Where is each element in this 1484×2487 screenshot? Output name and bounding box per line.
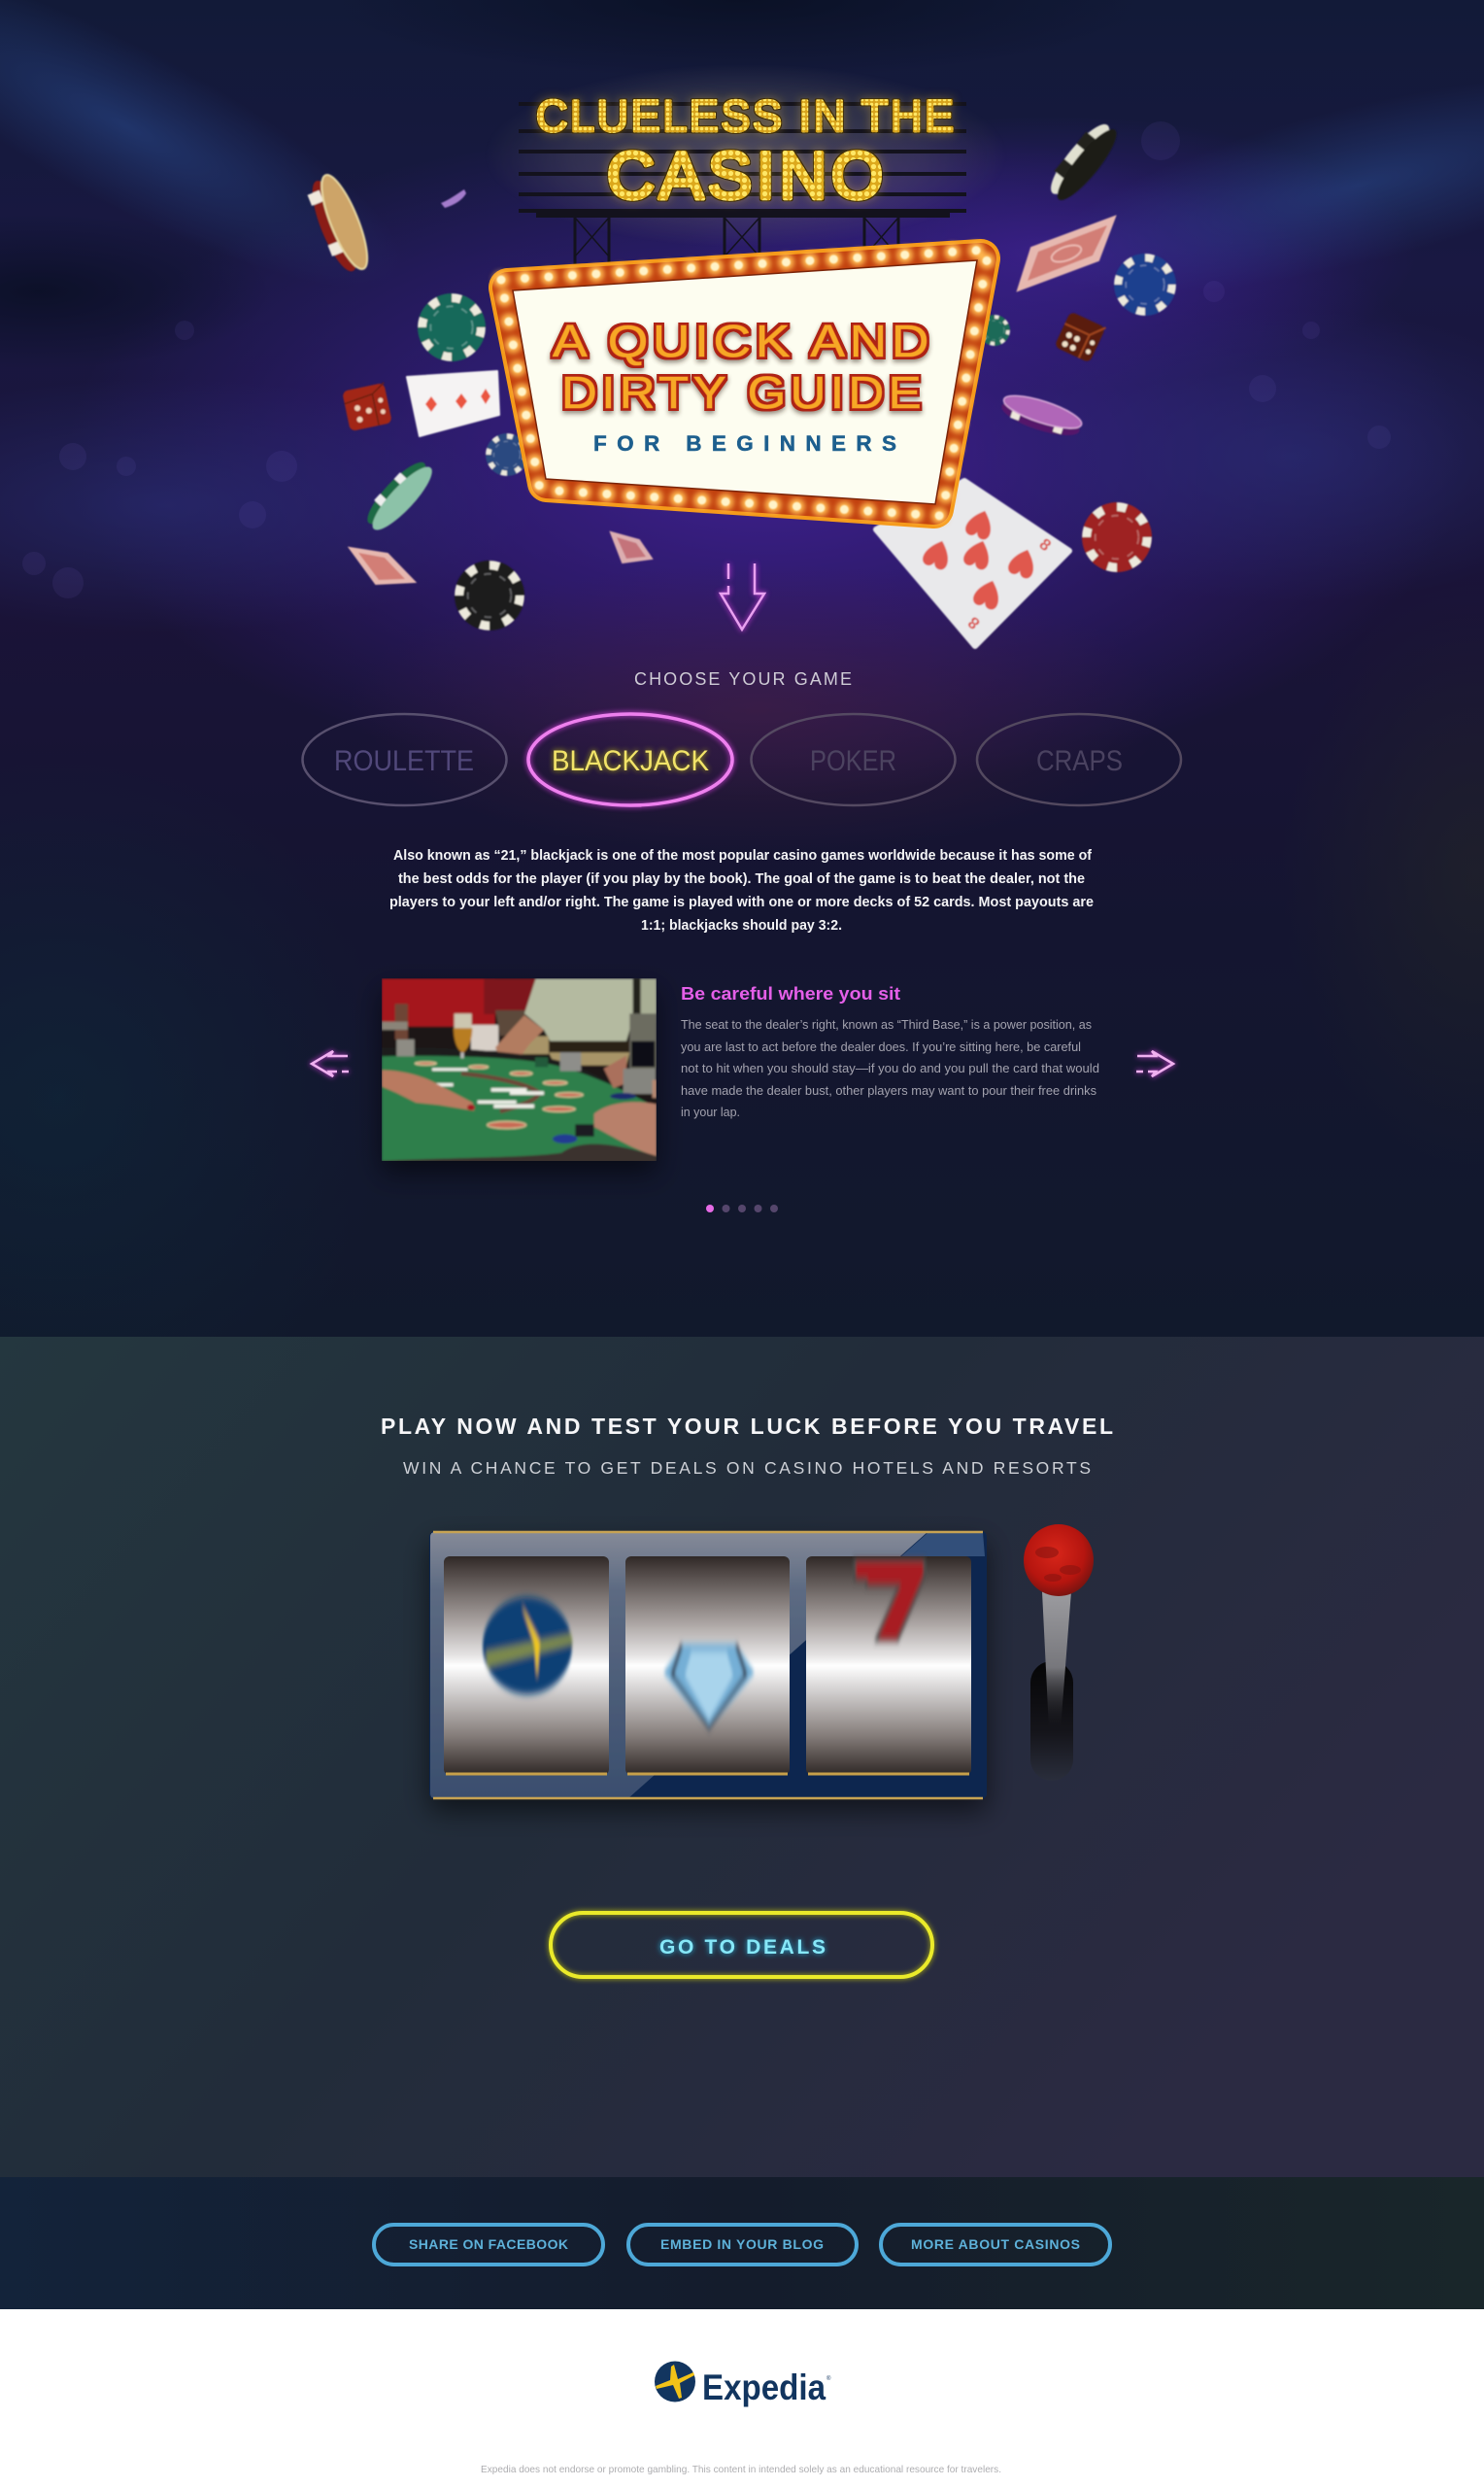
slide body text: not to hit when you should stay—if you do and you pull the card that would (681, 1061, 1099, 1075)
slide body text: have made the dealer bust, other players may want to pour their free drinks (681, 1083, 1096, 1098)
chip: green behind sign (979, 315, 1010, 346)
flying chips and cards (303, 117, 1176, 646)
button: embed in your blog (628, 2225, 857, 2265)
Expedia logo (655, 2361, 831, 2407)
button: go to deals (551, 1913, 932, 1977)
sign subhead: FOR BEGINNERS (593, 431, 896, 456)
billboard scaffold (519, 102, 966, 267)
carousel dots (706, 1205, 778, 1212)
title sign: Clueless in the Casino (484, 63, 1008, 267)
option: roulette: ROULETTE (334, 745, 474, 777)
game description (389, 847, 1094, 934)
game description: 1:1; blackjacks should pay 3:2. (641, 917, 842, 934)
disclaimer: Expedia does not endorse or promote gambling. This content in intended solely as an educational resource for travelers. (481, 2464, 1001, 2475)
reel 1 with Expedia globe (444, 1556, 609, 1775)
reel 3 with red seven (806, 1556, 971, 1775)
button: share on facebook (374, 2225, 603, 2265)
slot lever (1024, 1524, 1094, 1781)
marquee sign (501, 250, 989, 516)
section heading: PLAY NOW AND TEST YOUR LUCK BEFORE YOU TRAVEL (381, 1414, 1113, 1439)
option: roulette (303, 714, 507, 805)
chip: tilted green (359, 455, 439, 537)
Expedia logo: Expedia (702, 2368, 826, 2407)
chip: red right (1082, 502, 1152, 572)
game selector (303, 714, 1181, 805)
slide body text: The seat to the dealer’s right, known as “Third Base,” is a power position, as (681, 1017, 1092, 1032)
panel: slot machine section (0, 1337, 1484, 2177)
option: poker: POKER (810, 745, 896, 777)
chip: blue behind sign (486, 433, 528, 476)
panel: share bar (0, 2177, 1484, 2309)
game description: Also known as “21,” blackjack is one of the most popular casino games worldwide because it has some of (393, 847, 1093, 864)
chip: green (418, 293, 486, 361)
dice: red left (342, 383, 392, 431)
sign headline line 2: DIRTY GUIDE (561, 367, 926, 418)
card back: bottom centre (611, 532, 652, 562)
slide body text (681, 1017, 1099, 1119)
section subheading: WIN A CHANCE TO GET DEALS ON CASINO HOTELS AND RESORTS (403, 1458, 1091, 1478)
large playing card: eight of hearts: 8 (1035, 535, 1055, 555)
slide body text: you are last to act before the dealer does. If you’re sitting here, be careful (681, 1039, 1081, 1054)
button: more about casinos (881, 2225, 1110, 2265)
photo: blackjack table (382, 978, 657, 1166)
sign panel (513, 260, 977, 504)
icon: right neon arrow (1136, 1051, 1173, 1076)
button: share on facebook: SHARE ON FACEBOOK (409, 2236, 568, 2252)
card back: bottom left (350, 548, 415, 584)
slide heading: Be careful where you sit (681, 984, 900, 1004)
reel 2 with diamond (625, 1556, 790, 1775)
chip: black (455, 561, 524, 630)
chip: tilted red (303, 170, 376, 278)
title line 2: CASINO (607, 139, 883, 213)
large playing card: eight of hearts: 8 (964, 613, 984, 632)
option: craps: CRAPS (1036, 745, 1123, 777)
option: blackjack (active) (528, 714, 732, 805)
panel: footer (0, 2309, 1484, 2487)
title line 1: CLUELESS IN THE (536, 91, 954, 141)
playing card: three of diamonds (407, 371, 499, 436)
chip: tilted black (1042, 117, 1124, 207)
chip: tilted purple (998, 390, 1085, 442)
large playing card: eight of hearts (876, 481, 1069, 646)
game description: players to your left and/or right. The game is played with one or more decks of 52 cards. Most payouts are (389, 894, 1094, 910)
sign headline line 1: A QUICK AND (553, 316, 933, 366)
card back: top right (1018, 217, 1115, 290)
chip: blue (1114, 254, 1176, 316)
dice: dark right (1054, 311, 1106, 363)
button: go to deals: GO TO DEALS (659, 1936, 826, 1959)
slide body text: in your lap. (681, 1105, 740, 1119)
option: blackjack (active): BLACKJACK (552, 745, 709, 777)
Expedia logo: ® (826, 2375, 831, 2382)
option: craps (977, 714, 1181, 805)
machine frame (429, 1531, 987, 1799)
heading: choose your game: CHOOSE YOUR GAME (634, 669, 852, 689)
game description: the best odds for the player (if you play by the book). The goal of the game is to beat the dealer, not the (398, 870, 1085, 887)
option: poker (752, 714, 956, 805)
icon: left neon arrow (312, 1051, 349, 1076)
slot machine (429, 1531, 987, 1799)
hero background (0, 0, 1484, 1448)
icon: neon down arrow (721, 563, 764, 630)
button: embed in your blog: EMBED IN YOUR BLOG (660, 2236, 824, 2252)
button: more about casinos: MORE ABOUT CASINOS (911, 2236, 1080, 2252)
card fragment: small purple (441, 189, 466, 208)
